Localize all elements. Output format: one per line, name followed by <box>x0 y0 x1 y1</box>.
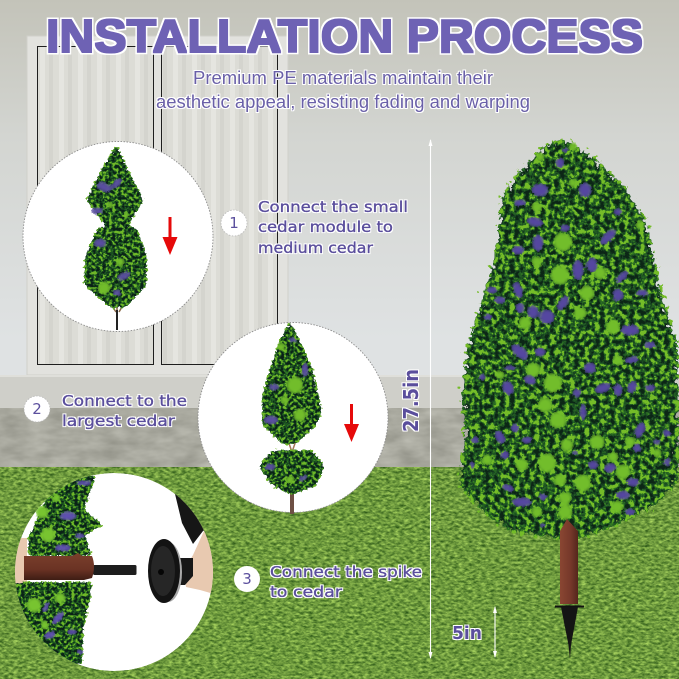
lawn <box>0 467 679 679</box>
panel: step 3 circle <box>8 472 215 671</box>
number badge 1: 1 <box>229 214 239 232</box>
trunk <box>560 519 578 604</box>
number badge 3 <box>234 566 260 592</box>
arrow: spike 5in <box>493 606 497 658</box>
label: 5in: 5in <box>452 623 482 644</box>
medium tree: cone and ball <box>258 320 325 514</box>
arrow: red down <box>162 217 178 255</box>
sleeve <box>175 494 204 544</box>
main tree with spike <box>458 138 679 659</box>
lime clusters <box>481 142 662 520</box>
small tree: two modules <box>84 144 147 330</box>
skin behind tube <box>15 538 27 590</box>
panel: step 2 circle <box>198 320 388 514</box>
title: INSTALLATION PROCESS <box>46 10 643 62</box>
step 3 text <box>270 563 422 601</box>
step 3 text: Connect the spike <box>270 563 422 581</box>
foliage: upper and lower branch <box>16 476 103 664</box>
spike <box>555 606 584 659</box>
number badge 1 <box>221 210 247 236</box>
step 1 text: cedar module to <box>258 218 393 236</box>
arrow: height 27.5in <box>428 139 432 659</box>
step 1 text: medium cedar <box>258 239 374 257</box>
subtitle <box>156 68 530 112</box>
subtitle: Premium PE materials maintain their <box>193 68 493 88</box>
number badge 2: 2 <box>32 400 42 418</box>
number badge 2 <box>24 396 50 422</box>
step 1 text: Connect the small <box>258 198 408 216</box>
step 2 text: Connect to the <box>62 392 187 410</box>
subtitle: aesthetic appeal, resisting fading and warping <box>156 92 530 112</box>
number badge 3: 3 <box>242 570 252 588</box>
spike handle <box>180 558 193 585</box>
panel: step 1 circle <box>23 142 213 332</box>
step 3 label <box>234 563 422 601</box>
spike disc <box>148 539 180 603</box>
foliage <box>458 138 679 541</box>
step 3 text: to cedar <box>270 583 343 601</box>
window frame <box>27 36 288 375</box>
step 2 label <box>24 392 187 430</box>
label: 27.5in: 27.5in <box>399 369 423 432</box>
arrow: red down <box>344 404 359 442</box>
hand <box>184 531 214 594</box>
step 2 text: largest cedar <box>62 412 176 430</box>
step 1 text <box>258 198 408 257</box>
lavender blooms <box>469 147 672 529</box>
tube and rod <box>24 553 136 580</box>
step 2 text <box>62 392 187 430</box>
step 1 label <box>221 198 408 257</box>
